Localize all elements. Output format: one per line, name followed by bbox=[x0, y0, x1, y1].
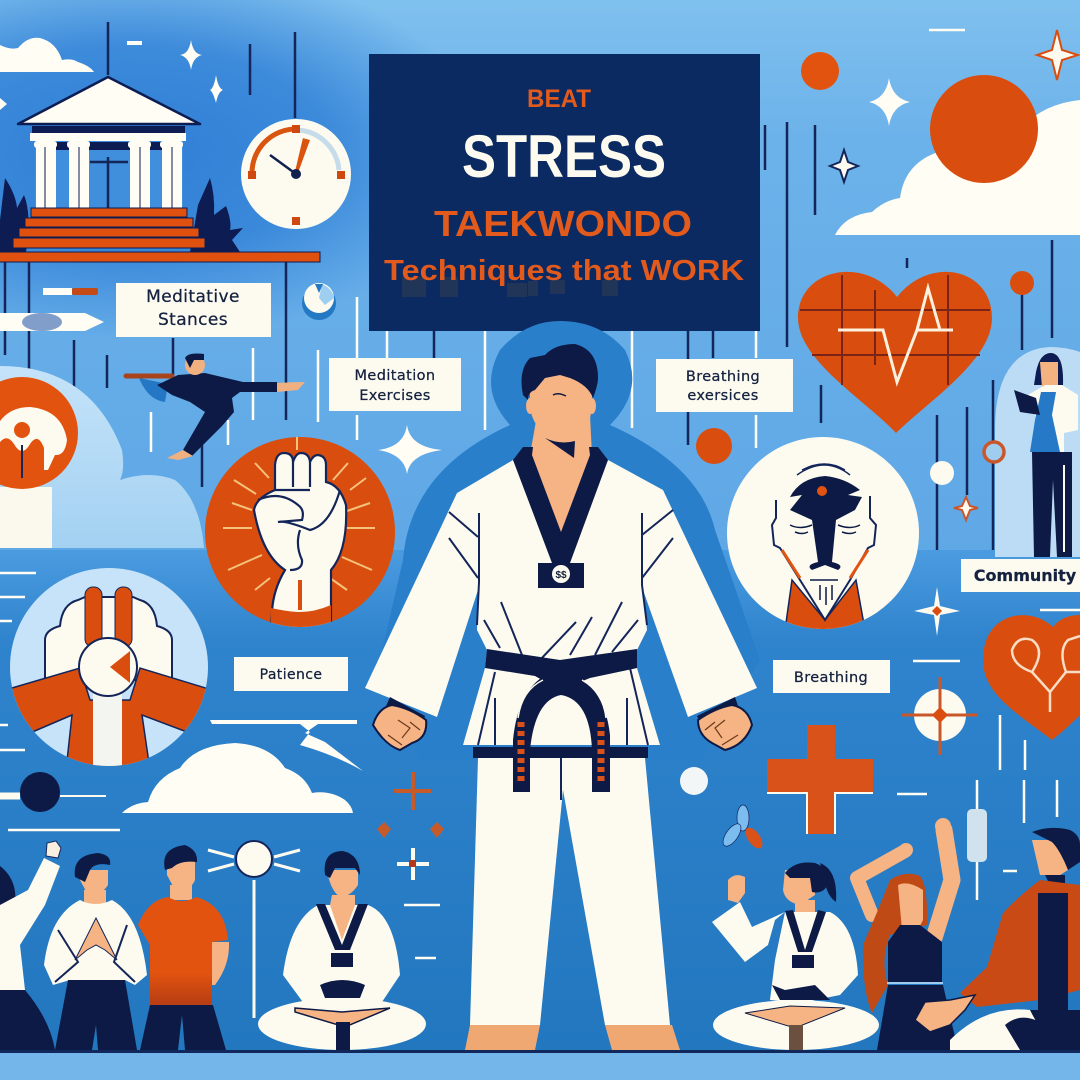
decorative dots right bbox=[680, 30, 1078, 795]
label: Meditation Exercises: Meditation bbox=[354, 368, 436, 384]
belt bbox=[485, 649, 637, 690]
cloud: pale left bbox=[0, 366, 204, 548]
label: Community bbox=[961, 559, 1080, 592]
fists bbox=[373, 705, 426, 750]
figure: central taekwondo master bbox=[365, 321, 760, 1050]
icon: small pie bbox=[302, 283, 336, 320]
neck and chest bbox=[530, 415, 592, 534]
icon: sun on pole bbox=[208, 841, 300, 1018]
steps bbox=[0, 208, 320, 262]
title panel bbox=[369, 54, 760, 331]
figure: woman cheering red hair bbox=[857, 818, 958, 1050]
label: Patience bbox=[234, 657, 348, 691]
figure: central taekwondo master: $$ bbox=[555, 570, 567, 581]
label: Breathing exersices bbox=[656, 359, 793, 412]
label: Meditation Exercises bbox=[329, 358, 461, 411]
clock bbox=[241, 119, 351, 229]
label: Breathing: Breathing bbox=[794, 670, 868, 686]
figure: man with hands in prayer bbox=[44, 853, 147, 1050]
shadow under chin bbox=[545, 438, 575, 458]
dobok top bbox=[365, 460, 757, 745]
figure: kicking person bbox=[126, 354, 305, 460]
title: Techniques that WORK: Techniques that WORK bbox=[384, 255, 744, 287]
title: STRESS: STRESS bbox=[462, 123, 666, 190]
label: Breathing exersices: exersices bbox=[687, 388, 759, 404]
label: Patience: Patience bbox=[260, 667, 322, 683]
figure: cheering person left bbox=[0, 841, 61, 1050]
label: Breathing exersices: Breathing bbox=[686, 369, 760, 385]
icon: small crosses bbox=[377, 772, 444, 880]
figure: seated woman with raised fist bbox=[712, 862, 879, 1050]
icon: left orange target bbox=[0, 377, 78, 548]
collar bbox=[513, 447, 608, 563]
icon: heart lower right bbox=[983, 615, 1080, 740]
head bbox=[530, 360, 592, 426]
cloud: top left bbox=[0, 38, 94, 72]
label: Breathing bbox=[773, 660, 890, 693]
badge bbox=[538, 563, 584, 588]
icon: heart with pulse bbox=[798, 272, 992, 433]
bushes bbox=[0, 178, 243, 252]
icon: sparkles bbox=[0, 40, 910, 474]
icon: red plus bbox=[767, 725, 873, 834]
icon: butterfly bbox=[720, 805, 766, 851]
icon: checkered stick bbox=[967, 809, 987, 862]
title: TAEKWONDO: TAEKWONDO bbox=[434, 203, 692, 244]
icon: hands in circle bbox=[5, 568, 212, 770]
label: Meditative Stances: Meditative bbox=[146, 287, 240, 307]
cloud: top right bbox=[835, 100, 1080, 235]
label: Community: Community bbox=[974, 566, 1077, 585]
figure: man in orange jacket bbox=[915, 828, 1080, 1050]
icon: ring bbox=[984, 442, 1004, 462]
fold lines bbox=[449, 510, 673, 745]
figure: man in orange t-shirt bbox=[138, 845, 229, 1050]
figure: seated man meditating bbox=[258, 851, 426, 1050]
title: BEAT: BEAT bbox=[527, 85, 591, 113]
trousers bbox=[470, 758, 670, 1025]
temple bbox=[0, 77, 320, 262]
icon: face in circle bbox=[727, 437, 919, 630]
cuffs bbox=[386, 697, 425, 722]
icon: target cross bbox=[902, 677, 978, 755]
label: Meditation Exercises: Exercises bbox=[359, 388, 431, 404]
icon: fist in orange circle bbox=[205, 437, 395, 632]
halo behind figure bbox=[380, 321, 760, 760]
image artifacts under title bbox=[402, 277, 618, 297]
icon: dot and line left bbox=[0, 772, 106, 812]
columns bbox=[34, 141, 183, 208]
label: Meditative Stances bbox=[116, 283, 271, 337]
label: Meditative Stances: Stances bbox=[158, 310, 228, 330]
swoosh bbox=[210, 720, 363, 771]
hair bbox=[522, 344, 598, 400]
roof bbox=[18, 77, 200, 124]
icon: pencil and banner bbox=[0, 288, 104, 331]
feet bbox=[465, 1025, 540, 1050]
cloud: centre left bbox=[122, 743, 353, 813]
figure: woman doctor with book bbox=[995, 347, 1080, 557]
